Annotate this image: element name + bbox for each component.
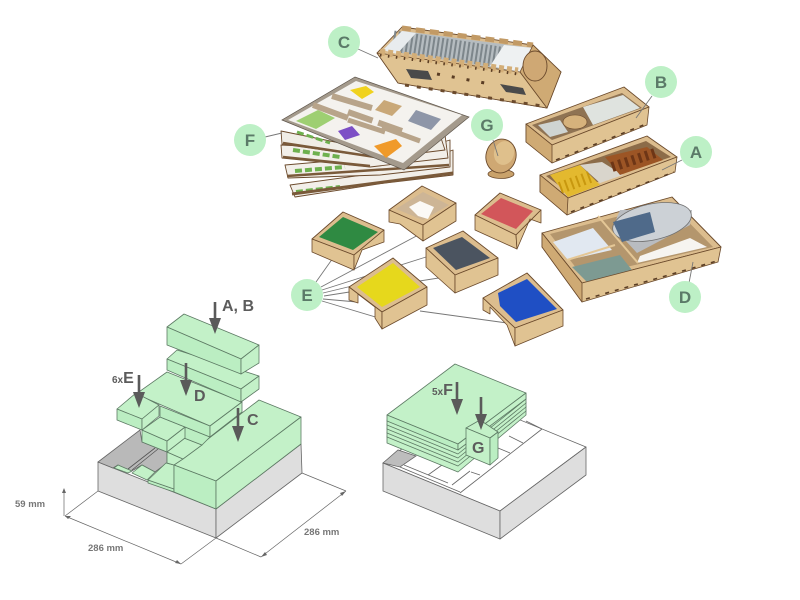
photo: board stack F	[281, 77, 469, 197]
text: G: G	[472, 440, 484, 457]
photo: tray B	[526, 87, 649, 163]
label: E with leader lines: E	[301, 286, 313, 305]
label: A: A	[690, 143, 702, 162]
label: D	[669, 262, 701, 313]
label: E with leader lines	[291, 233, 507, 323]
diagram: left box with stacked trays	[98, 314, 302, 538]
arrow: D	[180, 363, 192, 396]
diagram: right box with boards and coin	[383, 364, 586, 539]
photo: small yellow tray	[349, 258, 427, 329]
label: C: C	[338, 33, 350, 52]
photo: small white tray	[389, 186, 456, 241]
dimensions: height, width, depth: 286 mm	[304, 527, 339, 538]
tray E block	[117, 393, 159, 430]
text: A, B: A, B	[222, 298, 254, 315]
photo: tray D	[542, 196, 721, 302]
photo: small green tray	[312, 212, 384, 270]
dimensions: height, width, depth: 286 mm	[88, 543, 123, 554]
text: 5xF: 5xF	[432, 382, 453, 399]
label: G: G	[480, 116, 494, 135]
dimensions: height, width, depth	[15, 473, 346, 564]
stack of 5 boards	[387, 364, 526, 472]
label: B	[636, 66, 677, 118]
box base	[383, 399, 586, 539]
dimensions: height, width, depth: 59 mm	[15, 499, 45, 510]
low inserts in box	[114, 463, 174, 492]
arrow: A, B	[209, 302, 221, 334]
photo: tray A	[540, 136, 677, 215]
label: G	[471, 109, 503, 156]
label: B: B	[655, 73, 667, 92]
box base	[98, 430, 302, 538]
tray D block	[136, 372, 242, 437]
arrow: G	[475, 397, 487, 430]
tray A block	[167, 314, 259, 374]
photo: tray C with cards	[377, 27, 561, 108]
E stack lower blocks	[142, 417, 210, 465]
label: D: D	[679, 288, 691, 307]
photo: small black tray	[426, 231, 498, 293]
photo: small blue tray	[483, 273, 563, 346]
arrow: C	[232, 408, 244, 442]
text: C: C	[247, 412, 259, 429]
photo: small red tray	[475, 193, 541, 249]
tray B block	[167, 350, 259, 402]
label: F: F	[245, 131, 255, 150]
arrow: E	[133, 375, 145, 408]
label: F	[234, 124, 282, 156]
text: D: D	[194, 388, 206, 405]
text: 6xE: 6xE	[112, 370, 134, 387]
photo: coin token G	[482, 136, 520, 178]
label: A	[662, 136, 712, 170]
token G cube	[466, 420, 498, 465]
arrow: F	[451, 382, 463, 415]
tray C block	[174, 400, 301, 509]
label: C	[328, 26, 378, 58]
